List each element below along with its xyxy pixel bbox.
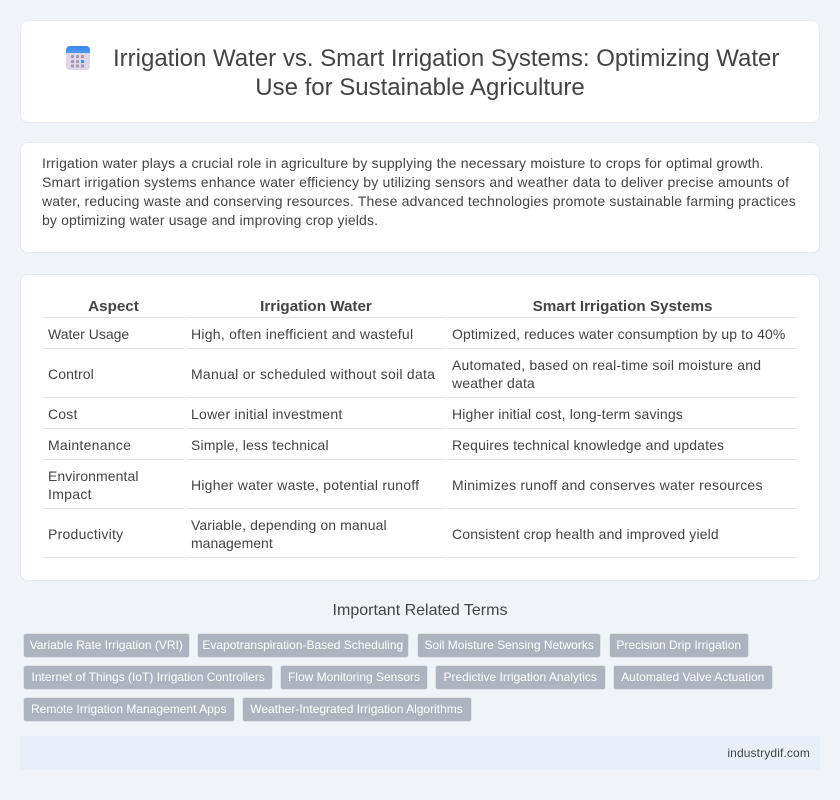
tag: Precision Drip Irrigation	[616, 638, 741, 652]
tag	[242, 697, 472, 722]
title text	[113, 45, 779, 101]
tag: Internet of Things (IoT) Irrigation Controllers	[32, 670, 265, 684]
tag	[417, 633, 601, 658]
row: productivity: Productivity	[48, 526, 123, 542]
row: control: Control	[48, 366, 94, 382]
tag: Evapotranspiration-Based Scheduling	[202, 638, 403, 652]
row: maintenance: Requires technical knowledge and updates	[452, 437, 724, 453]
footer	[20, 736, 820, 770]
tag	[23, 665, 273, 690]
table header: Irrigation Water	[260, 298, 372, 315]
intro text: Irrigation water plays a crucial role in agriculture by supplying the necessary moisture to crops for optimal growth.	[42, 155, 764, 171]
row: cost: Higher initial cost, long-term savings	[452, 406, 683, 422]
row: cost: Cost	[48, 406, 78, 422]
intro text	[42, 155, 796, 228]
tag	[23, 633, 190, 658]
tag: Automated Valve Actuation	[621, 670, 764, 684]
row: environmental impact	[48, 468, 763, 502]
intro text: water, reducing waste and conserving resources. These advanced technologies promote sustainable farming practices	[42, 193, 796, 209]
row: control: Manual or scheduled without soil data	[191, 366, 435, 382]
row: maintenance: Maintenance	[48, 437, 131, 453]
table header: Smart Irrigation Systems	[533, 298, 712, 315]
heading: important related terms: Important Related Terms	[333, 602, 507, 619]
tag: Predictive Irrigation Analytics	[443, 670, 597, 684]
tag	[609, 633, 749, 658]
tag	[197, 633, 409, 658]
row: environmental impact: Impact	[48, 486, 92, 502]
row: water usage	[48, 326, 786, 342]
row: water usage: Water Usage	[48, 326, 129, 342]
tag	[280, 665, 428, 690]
tag	[435, 665, 606, 690]
row: control: Automated, based on real-time soil moisture and	[452, 357, 761, 373]
icon: calendar	[66, 46, 90, 70]
row: control	[48, 357, 761, 391]
row: water usage: Optimized, reduces water consumption by up to 40%	[452, 326, 786, 342]
row: productivity: Variable, depending on manual	[191, 517, 387, 533]
row: cost	[48, 406, 683, 422]
row: environmental impact: Environmental	[48, 468, 139, 484]
tag	[612, 665, 773, 690]
row: water usage: High, often inefficient and wasteful	[191, 326, 413, 342]
panel: title	[20, 20, 820, 123]
table header	[88, 298, 712, 315]
row: maintenance: Simple, less technical	[191, 437, 329, 453]
panel: introduction	[20, 142, 820, 253]
row: maintenance	[48, 437, 724, 453]
tag: Variable Rate Irrigation (VRI)	[30, 638, 183, 652]
panel: comparison table	[20, 274, 820, 581]
intro text: by optimizing water usage and improving crop yields.	[42, 212, 378, 228]
row: productivity: Consistent crop health and improved yield	[452, 526, 719, 542]
tag: Remote Irrigation Management Apps	[31, 702, 226, 716]
tag: Weather-Integrated Irrigation Algorithms	[250, 702, 463, 716]
intro text: Smart irrigation systems enhance water efficiency by utilizing sensors and weather data to deliver precise amounts of	[42, 174, 789, 190]
row: environmental impact: Minimizes runoff and conserves water resources	[452, 477, 763, 493]
footer source text: industrydif.com	[727, 746, 810, 760]
row: cost: Lower initial investment	[191, 406, 343, 422]
title text: Irrigation Water vs. Smart Irrigation Systems: Optimizing Water	[113, 45, 779, 72]
tag: Flow Monitoring Sensors	[288, 670, 420, 684]
related terms tags	[23, 633, 773, 722]
table header: Aspect	[88, 298, 139, 315]
title text: Use for Sustainable Agriculture	[255, 74, 585, 101]
row: control: weather data	[452, 375, 535, 391]
row: environmental impact: Higher water waste, potential runoff	[191, 477, 419, 493]
row: productivity	[48, 517, 719, 551]
row: productivity: management	[191, 535, 273, 551]
tag: Soil Moisture Sensing Networks	[424, 638, 594, 652]
tag	[23, 697, 234, 722]
